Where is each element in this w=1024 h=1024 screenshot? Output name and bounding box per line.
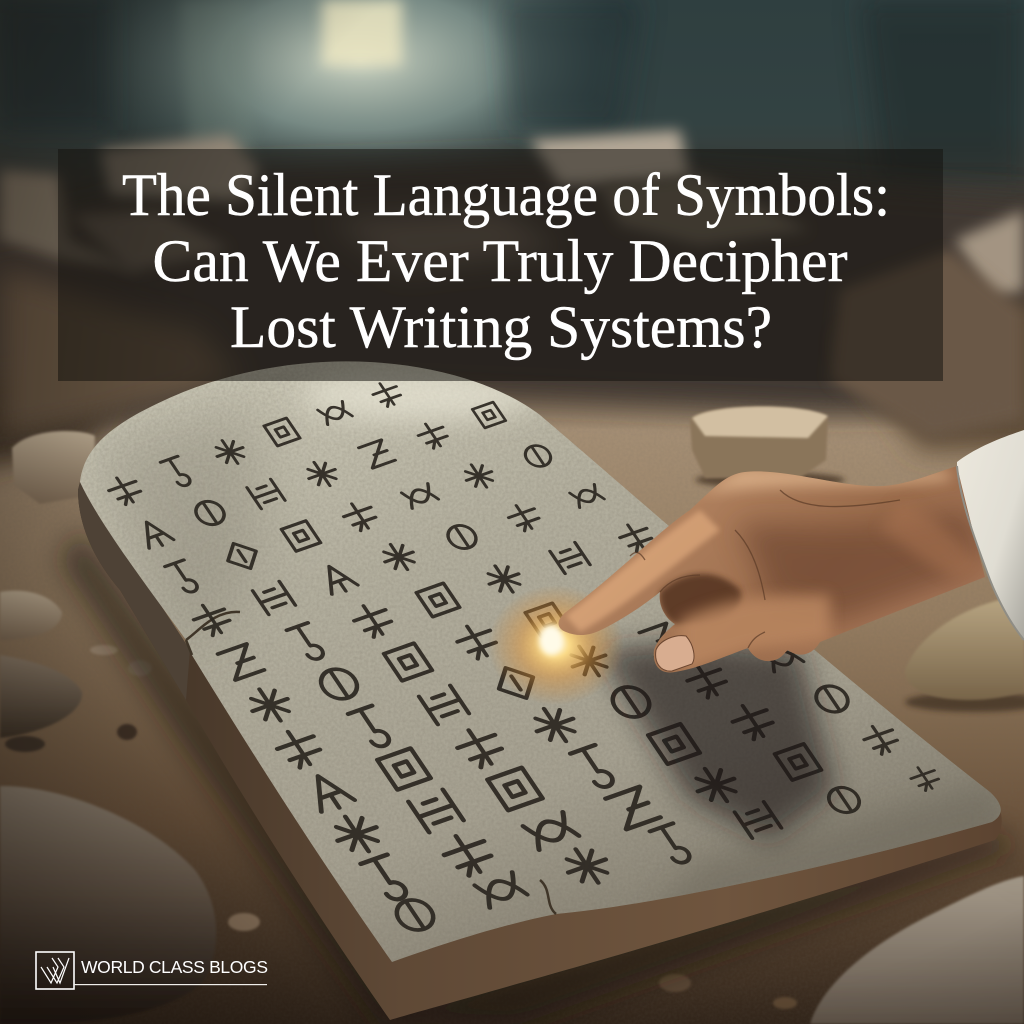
title text [122,162,890,360]
stone tablet [70,350,1010,1020]
blurred background stones [0,130,1024,440]
thumb nail [656,636,694,671]
stones lower left [0,591,82,738]
hand shadow on tablet [600,640,835,840]
carved symbols on tablet [103,379,944,934]
title text: Lost Writing Systems? [230,294,772,360]
large stone bottom left [0,786,216,1024]
tablet left side shade [78,482,190,700]
sandy ground grain [0,400,1024,1024]
glowing light under fingertip [488,585,624,705]
small pebbles [5,645,797,1009]
brand logo [36,952,268,989]
stone right of tablet [905,596,1024,712]
shading of hand [735,505,985,620]
brand underline [74,984,267,985]
finger creases [630,490,900,648]
title text: Can We Ever Truly Decipher [152,228,848,294]
logo mark [36,952,74,989]
large stone bottom right [810,876,1024,1024]
tablet grain and shadow [70,350,1010,970]
brand name: WORLD CLASS BLOGS [81,957,268,977]
stone at left behind tablet [12,431,95,504]
tablet side thickness [78,482,1002,1020]
title panel [58,149,943,381]
hand pointing at symbol [558,466,985,673]
ground shadow around tablet [60,530,1024,1024]
stone block behind hand [690,406,845,488]
sleeve cuff fold [957,466,1024,640]
sleeve [957,430,1024,640]
tablet crack [186,612,556,914]
title text: The Silent Language of Symbols: [122,162,890,228]
tablet top surface [80,361,1001,962]
